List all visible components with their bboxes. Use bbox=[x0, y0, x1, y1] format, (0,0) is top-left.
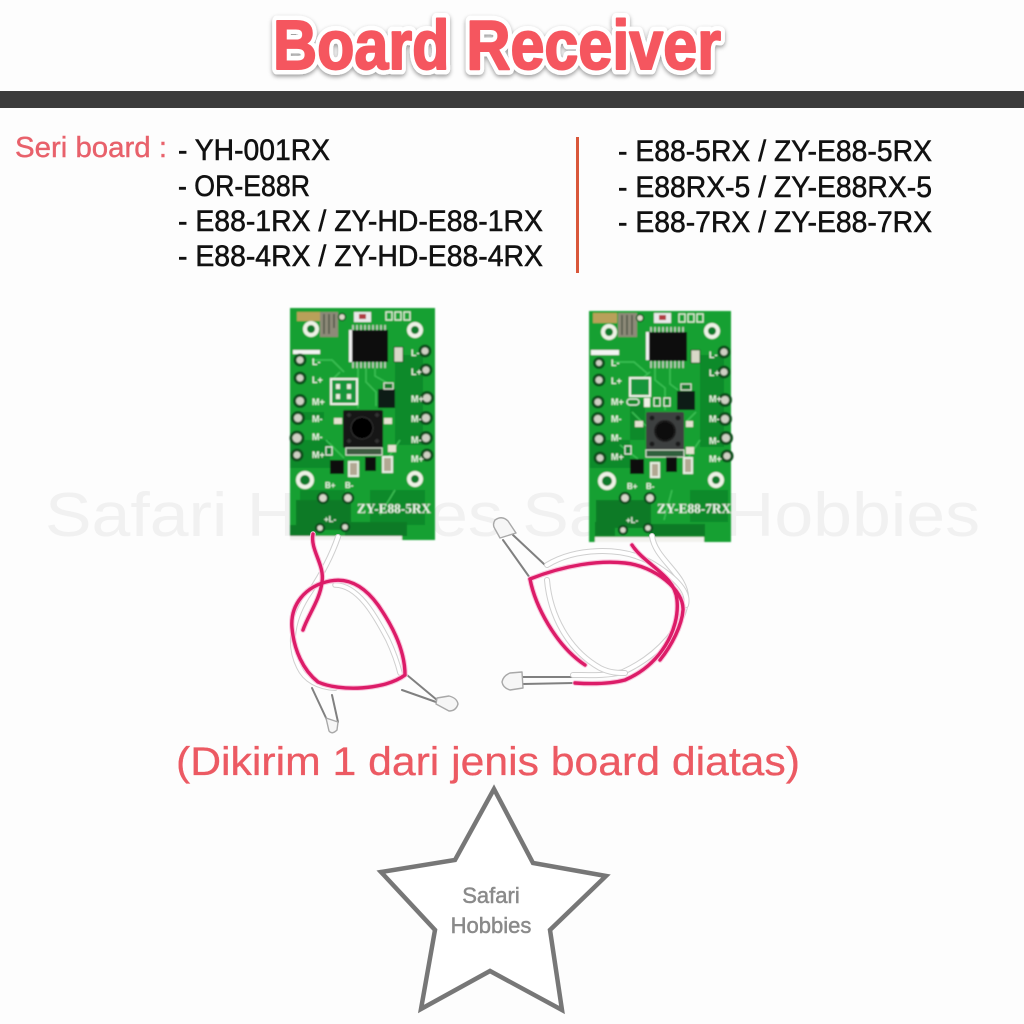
antenna pad bbox=[593, 313, 617, 323]
silk labels: M- bbox=[411, 435, 422, 445]
white wires bbox=[547, 536, 687, 675]
transistors and capacitors bbox=[330, 460, 344, 474]
pink wire bbox=[292, 534, 405, 688]
silk labels: M+ bbox=[611, 452, 624, 462]
silkscreen strip bbox=[591, 350, 619, 355]
silk labels: L+ bbox=[312, 375, 323, 385]
silk labels: M- bbox=[709, 414, 720, 424]
pink wires bbox=[530, 545, 683, 684]
silk labels: M- bbox=[611, 433, 622, 443]
board: ZY-E88-5RX: B- bbox=[345, 481, 354, 490]
star outline bbox=[381, 789, 606, 1010]
bottom strip bbox=[595, 537, 704, 542]
silk labels: L+ bbox=[411, 367, 422, 377]
small chip bbox=[677, 391, 695, 410]
list: left column: - E88-4RX / ZY-HD-E88-4RX bbox=[178, 240, 543, 273]
pcb bbox=[290, 308, 435, 540]
wires and LED: left board bbox=[292, 534, 458, 733]
silk labels: M- bbox=[709, 436, 720, 446]
silk labels: L+ bbox=[611, 376, 622, 386]
silk labels: M- bbox=[611, 414, 622, 424]
board: ZY-E88-5RX: B+ bbox=[325, 481, 336, 490]
silk labels: L- bbox=[709, 350, 718, 360]
silk labels bbox=[611, 350, 722, 464]
board: ZY-E88-7RX bbox=[589, 311, 732, 542]
silk labels: M+ bbox=[709, 394, 722, 404]
list: right column: - E88RX-5 / ZY-E88RX-5 bbox=[618, 171, 932, 204]
silk labels: M+ bbox=[312, 397, 325, 407]
title: Board Receiver bbox=[273, 6, 721, 84]
list: left column: - E88-1RX / ZY-HD-E88-1RX bbox=[178, 205, 543, 238]
main chip bbox=[646, 332, 649, 360]
board: ZY-E88-7RX: B- bbox=[646, 482, 655, 491]
column divider bbox=[576, 137, 579, 273]
sensor module bbox=[331, 379, 357, 404]
silk labels bbox=[312, 348, 424, 464]
watermark: Safari Hobbies Safari Hobbies bbox=[45, 481, 980, 550]
tactile switch bbox=[343, 410, 383, 448]
LED bodies bbox=[326, 696, 458, 733]
main chip bbox=[349, 330, 352, 362]
white wire bbox=[293, 537, 400, 688]
header bar bbox=[0, 91, 1024, 108]
silk labels: M- bbox=[411, 414, 422, 424]
silk labels: L- bbox=[611, 358, 620, 368]
silk labels: M- bbox=[312, 414, 322, 424]
logo text: Safari bbox=[462, 883, 520, 908]
logo: star bbox=[381, 789, 606, 1010]
wires and LEDs: right board bbox=[494, 518, 687, 690]
logo text bbox=[451, 883, 531, 938]
list: right column: - E88-7RX / ZY-E88-7RX bbox=[618, 206, 932, 239]
small chip bbox=[378, 389, 395, 408]
silk labels: L- bbox=[312, 357, 320, 367]
sensor module bbox=[630, 378, 650, 396]
silkscreen strip bbox=[293, 350, 320, 354]
silk labels: M+ bbox=[611, 397, 624, 407]
silk labels: M- bbox=[312, 432, 322, 442]
bottom strip bbox=[290, 536, 402, 540]
silk labels: L+ bbox=[709, 368, 720, 378]
title: Board Receiver bbox=[273, 6, 721, 84]
model text: ZY-E88-5RX bbox=[357, 502, 431, 517]
LED legs bbox=[503, 535, 574, 684]
solder pads bbox=[592, 347, 732, 463]
logo text: Hobbies bbox=[451, 913, 531, 938]
solder pads bbox=[291, 346, 432, 460]
LED legs bbox=[312, 675, 437, 722]
silk labels: M+ bbox=[411, 454, 424, 464]
silk labels: M+ bbox=[709, 454, 722, 464]
list: left column bbox=[178, 134, 543, 273]
list: left column: - YH-001RX bbox=[178, 134, 330, 167]
board: ZY-E88-7RX: +L- bbox=[626, 516, 639, 525]
board: ZY-E88-5RX: +L- bbox=[324, 515, 337, 524]
silk labels: M+ bbox=[312, 450, 325, 460]
list: left column: - OR-E88R bbox=[178, 170, 310, 203]
board: ZY-E88-7RX: B+ bbox=[627, 482, 638, 491]
pcb bbox=[589, 311, 731, 542]
battery pads bbox=[619, 493, 655, 534]
transistors and capacitors bbox=[630, 459, 644, 474]
mounting holes bbox=[298, 323, 421, 487]
antenna pad bbox=[297, 312, 322, 321]
silk labels: L- bbox=[411, 348, 420, 358]
silk labels: M+ bbox=[411, 394, 424, 404]
board: ZY-E88-5RX bbox=[290, 308, 435, 540]
label: seri board: Seri board : bbox=[15, 132, 167, 164]
model text: ZY-E88-7RX bbox=[657, 502, 731, 517]
list: right column: - E88-5RX / ZY-E88-5RX bbox=[618, 135, 932, 168]
list: right column bbox=[618, 135, 932, 239]
mounting holes bbox=[600, 325, 722, 488]
LED bodies bbox=[494, 518, 523, 690]
tactile switch bbox=[646, 412, 684, 450]
battery pads bbox=[316, 493, 353, 532]
note: dikirim: (Dikirim 1 dari jenis board diatas) bbox=[176, 740, 800, 784]
